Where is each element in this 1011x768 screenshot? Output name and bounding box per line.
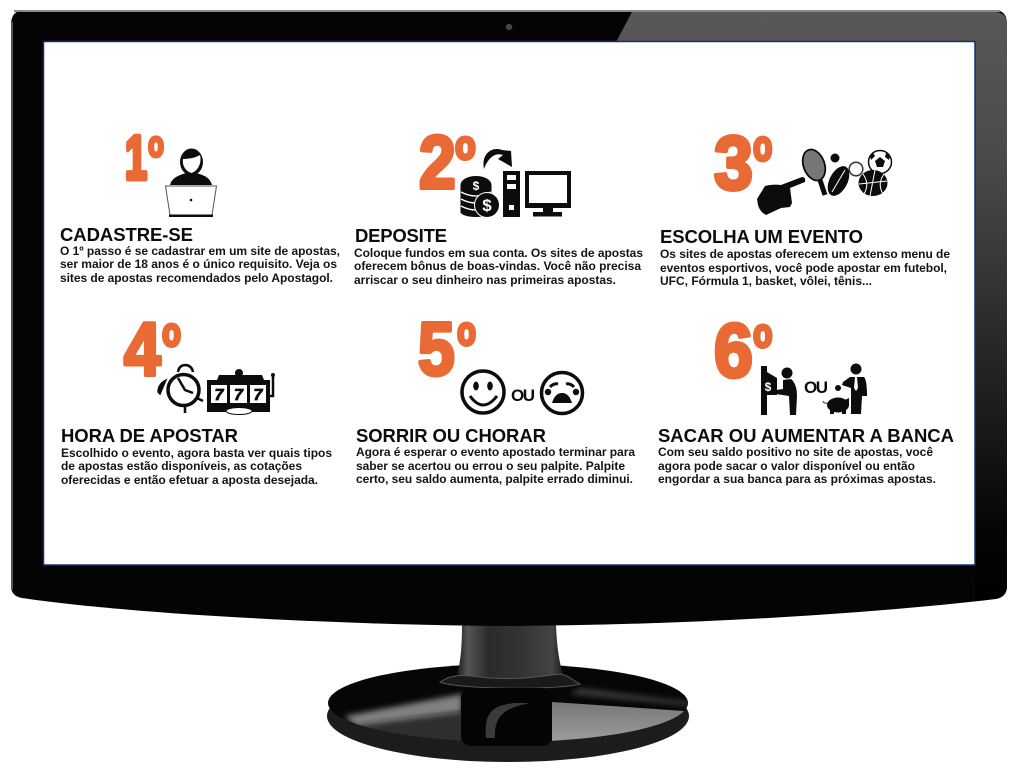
neck reflection on base [461,688,552,746]
screen [44,42,975,565]
number 3º: 3 [714,121,753,206]
icon: sports balls and racket [799,146,892,199]
description: Os sites de apostas oferecem um extenso menu de [660,247,950,261]
description: oferecidas e então efetuar a aposta desejada. [61,473,318,487]
heading: ESCOLHA UM EVENTO [660,226,863,247]
description: oferecem bônus de boas-vindas. Você não precisa [354,259,641,273]
label: ou: OU [511,386,535,405]
description: O 1º passo é se cadastrar em um site de apostas, [60,244,340,258]
icon: crying face [542,372,582,414]
icon: person at laptop [166,148,216,217]
description [660,247,950,288]
description: engordar a sua banca para as próximas apostas. [658,472,936,486]
icon: alarm clock [158,365,203,413]
description: sites de apostas recomendados pelo Apostagol. [60,271,333,285]
bezel gloss reflection [616,12,1007,601]
heading: SORRIR OU CHORAR [356,425,546,446]
description: ser maior de 18 anos é o único requisito. Veja os [60,257,337,271]
description: arriscar o seu dinheiro nas primeiras apostas. [354,273,616,287]
number 6º [714,309,772,394]
description: de apostas estão disponíveis, as cotações [61,459,302,473]
stand base rim [327,670,689,762]
monitor stand [327,625,700,762]
icon: person at cash machine: $ [765,380,772,394]
description [356,445,635,486]
heading: SACAR OU AUMENTAR A BANCA [658,425,954,446]
label: ou: OU [804,378,828,397]
heading: DEPOSITE [355,225,447,246]
number 5º: º [457,309,476,383]
number 3º [714,121,772,206]
icon: slot machine: 7 [234,387,244,404]
step 1: cadastre-se [60,124,340,285]
glossy highlight [486,703,530,738]
number 1º: 1 [125,124,147,193]
monitor bezel [11,10,1007,626]
bezel left edge highlight [11,22,13,590]
description: Escolhido o evento, agora basta ver quais tipos [61,446,332,460]
icon: slot machine: 7 [254,387,264,404]
icon: coins, arrow and computer: $ [482,196,492,215]
bezel top edge highlight [14,10,1000,12]
stand base reflections [344,686,688,741]
icon: person at cash machine [761,366,797,415]
icon: slot machine: 7 [215,387,225,404]
icon: coins, arrow and computer: $ [473,179,480,193]
description [354,246,643,287]
description: certo, seu saldo aumenta, palpite errado diminui. [356,472,633,486]
description [61,446,332,487]
webcam [506,24,512,30]
description: eventos esportivos, você pode apostar em futebol, [660,261,947,275]
icon: smiling face [462,371,504,413]
description [658,445,936,486]
icon: man dropping coin in piggy bank [823,364,867,414]
number 1º: º [148,125,164,192]
icon: pointing hand [757,177,805,215]
icon: coins, arrow and computer [460,149,571,218]
stand neck [457,625,563,680]
number 5º [418,307,476,391]
number 1º [125,124,164,193]
number 2º: º [455,124,475,197]
step 2: deposite [354,120,643,287]
description: UFC, Fórmula 1, basket, vôlei, tênis... [660,274,872,288]
step 4: hora de apostar [61,307,332,487]
heading: CADASTRE-SE [60,224,193,245]
description [60,244,340,285]
description: saber se acertou ou errou o seu palpite. Palpite [356,459,625,473]
description: Com seu saldo positivo no site de apostas, você [658,445,933,459]
number 6º: º [753,311,772,385]
stand base top surface [328,664,688,742]
number 2º: 2 [419,120,456,204]
number 4º [124,307,181,391]
bezel body [11,10,1007,626]
number 6º: 6 [714,309,753,394]
step 6: sacar ou aumentar a banca [658,309,954,486]
description: Agora é esperar o evento apostado terminar para [356,445,635,459]
number 3º: º [753,124,772,202]
step 5: sorrir ou chorar [356,307,635,486]
neck collar [440,674,580,688]
number 2º [419,120,475,204]
number 4º: º [162,310,181,384]
icon: slot machine [207,369,275,414]
description: agora pode sacar o valor disponível ou então [658,459,915,473]
step 3: escolha um evento [660,121,950,288]
number 4º: 4 [124,307,161,391]
number 5º: 5 [418,307,455,391]
heading: HORA DE APOSTAR [61,425,238,446]
description: Coloque fundos em sua conta. Os sites de apostas [354,246,643,260]
